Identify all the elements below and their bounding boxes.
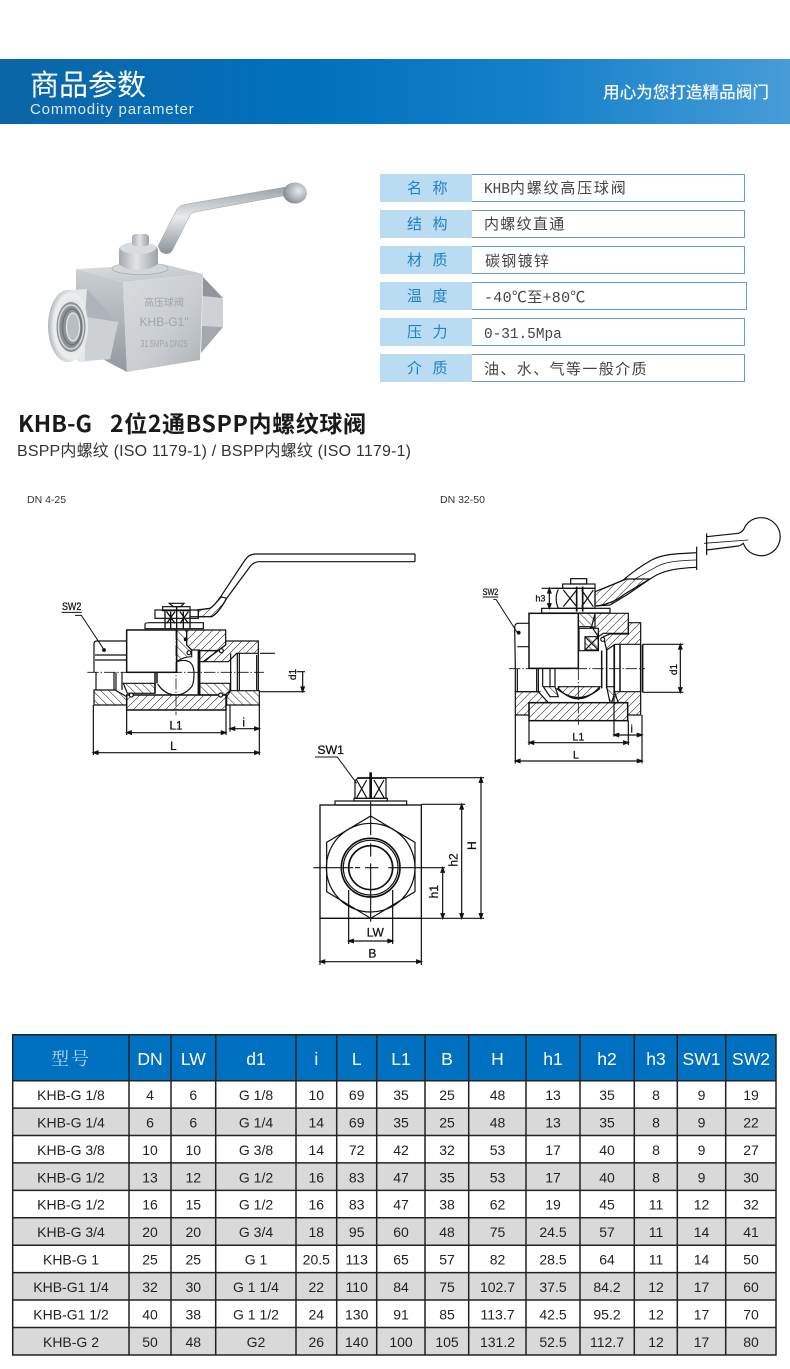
row 10: G2 xyxy=(247,1334,266,1350)
row 5 xyxy=(37,1197,759,1213)
table header: DN xyxy=(137,1049,163,1069)
engraved marks: 31.5MPa DN25 xyxy=(140,339,188,350)
technical drawing: DN 4-25 section view xyxy=(62,554,415,755)
parameter table xyxy=(13,1035,776,1355)
stem top xyxy=(355,778,386,798)
H dimension xyxy=(320,778,484,918)
row 9: 95.2 xyxy=(593,1306,621,1322)
row 8: 102.7 xyxy=(480,1279,515,1295)
row 8: G 1 1/4 xyxy=(233,1279,279,1295)
technical drawing: DN 32-50 section view xyxy=(483,518,780,763)
row 8: 75 xyxy=(439,1279,455,1295)
row 2: 6 xyxy=(189,1114,197,1130)
row 5: 16 xyxy=(309,1197,324,1213)
block top face xyxy=(76,264,203,282)
table header xyxy=(13,1035,776,1081)
row 2: 8 xyxy=(652,1114,660,1130)
row 8: 30 xyxy=(186,1279,201,1295)
left hex end xyxy=(60,289,118,362)
ball and bore xyxy=(158,660,194,695)
i dimension: i xyxy=(242,715,245,729)
row 1: 19 xyxy=(743,1087,759,1103)
row 1: 9 xyxy=(698,1087,706,1103)
spec row: name: 名称 xyxy=(407,177,458,198)
i dimension: i xyxy=(630,724,633,736)
row 10: 80 xyxy=(743,1334,759,1350)
h3 dimension xyxy=(535,588,563,608)
h2 dimension xyxy=(421,804,465,918)
handle xyxy=(158,187,288,254)
row 7: 64 xyxy=(599,1252,615,1268)
row 9: G 1 1/2 xyxy=(233,1306,279,1322)
row 9: 24 xyxy=(309,1306,324,1322)
table stripes xyxy=(13,1108,776,1355)
L1 dimension: L1 xyxy=(572,732,584,744)
LW dimension: LW xyxy=(367,926,385,940)
row 3: 32 xyxy=(439,1142,455,1158)
product photo: ball valve xyxy=(48,182,307,372)
row 5: 11 xyxy=(649,1197,663,1213)
table header: B xyxy=(441,1049,453,1069)
i dimension xyxy=(230,705,259,755)
row 7: 65 xyxy=(393,1252,409,1268)
spec row: medium: 介质 xyxy=(407,357,458,378)
table grid xyxy=(13,1035,776,1355)
d1 dimension: d1 xyxy=(669,663,680,675)
row 1: 13 xyxy=(545,1087,561,1103)
row 1: 10 xyxy=(309,1087,324,1103)
row 9: 40 xyxy=(142,1306,158,1322)
header banner xyxy=(0,59,790,124)
h2 dimension: h2 xyxy=(446,853,460,867)
white block xyxy=(529,613,578,668)
row 4: KHB-G 1/2 xyxy=(37,1169,105,1185)
hex nut xyxy=(327,816,415,918)
row 4: 12 xyxy=(186,1169,201,1185)
stem assembly xyxy=(571,579,587,584)
row 10: 48 xyxy=(186,1334,201,1350)
row 8: 84 xyxy=(393,1279,409,1295)
row 3: 14 xyxy=(309,1142,324,1158)
spec row: medium xyxy=(380,354,744,382)
row 5: 45 xyxy=(599,1197,615,1213)
row 9: 38 xyxy=(186,1306,201,1322)
H dimension: H xyxy=(465,841,479,850)
row 6: 20 xyxy=(142,1224,158,1240)
row 1: 35 xyxy=(599,1087,615,1103)
row 6: 20 xyxy=(186,1224,201,1240)
SW1 callout: SW1 xyxy=(317,743,344,757)
row 7: 25 xyxy=(186,1252,201,1268)
row 3: 8 xyxy=(652,1142,660,1158)
row 10: KHB-G 2 xyxy=(43,1334,99,1350)
washer and collar xyxy=(112,262,168,274)
row 5: G 1/2 xyxy=(239,1197,273,1213)
row 2: 25 xyxy=(439,1114,455,1130)
row 4: G 1/2 xyxy=(239,1169,273,1185)
row 2: 6 xyxy=(146,1114,154,1130)
row 3: 10 xyxy=(186,1142,201,1158)
row 5: 83 xyxy=(349,1197,365,1213)
row 5: 62 xyxy=(490,1197,505,1213)
spec row: structure: 内螺纹直通 xyxy=(484,213,566,234)
L dimension: L xyxy=(573,750,579,762)
engraved marks: KHB-G1" xyxy=(140,315,188,329)
row 2: 35 xyxy=(599,1114,615,1130)
row 5: 12 xyxy=(694,1197,709,1213)
row 6: G 3/4 xyxy=(239,1224,273,1240)
row 5: KHB-G 1/2 xyxy=(37,1197,105,1213)
row 9: 12 xyxy=(648,1306,664,1322)
spec row: pressure: 0-31.5Mpa xyxy=(484,327,562,343)
spec row: pressure xyxy=(380,318,744,346)
block front face xyxy=(123,274,203,372)
i dimension xyxy=(614,644,642,763)
spec row: structure: 结构 xyxy=(407,213,458,234)
row 3: G 3/8 xyxy=(239,1142,273,1158)
row 4: 13 xyxy=(142,1169,158,1185)
row 1: 8 xyxy=(652,1087,660,1103)
d1 dimension xyxy=(643,644,683,692)
spec row: temperature: -40℃至+80℃ xyxy=(484,290,586,307)
center lines xyxy=(313,866,445,869)
SW2 callout: SW2 xyxy=(62,601,81,613)
row 10: 26 xyxy=(309,1334,324,1350)
engraved marks: 高压球阀 xyxy=(144,294,184,309)
row 2 xyxy=(37,1114,759,1130)
row 5: 15 xyxy=(186,1197,201,1213)
table header: L xyxy=(352,1049,362,1069)
row 10: 105 xyxy=(435,1334,459,1350)
row 10: 100 xyxy=(389,1334,413,1350)
row 3: 40 xyxy=(599,1142,615,1158)
row 2: 48 xyxy=(490,1114,505,1130)
row 8: 17 xyxy=(694,1279,709,1295)
lower hatched parts xyxy=(123,683,155,693)
row 3: 10 xyxy=(142,1142,158,1158)
spec row: material xyxy=(380,246,744,274)
table header: L1 xyxy=(391,1049,411,1069)
h1 dimension xyxy=(427,868,444,918)
SW2 callout xyxy=(62,601,103,649)
d1 dimension xyxy=(260,653,305,692)
row 8: 37.5 xyxy=(539,1279,567,1295)
row 10: 17 xyxy=(694,1334,709,1350)
label: DN 4-25: DN 4-25 xyxy=(27,494,66,506)
row 8: 32 xyxy=(142,1279,158,1295)
table header: h2 xyxy=(597,1049,617,1069)
row 7: 14 xyxy=(694,1252,709,1268)
SW1 callout xyxy=(315,743,357,783)
row 4: 9 xyxy=(698,1169,706,1185)
row 3 xyxy=(37,1142,759,1158)
row 4: 16 xyxy=(309,1169,324,1185)
h1 dimension: h1 xyxy=(427,885,441,898)
table header: h3 xyxy=(646,1049,666,1069)
upper hatched body xyxy=(187,630,226,662)
row 6: KHB-G 3/4 xyxy=(37,1224,105,1240)
engraved marks xyxy=(140,294,188,350)
SW2 callout: SW2 xyxy=(483,587,498,597)
row 7 xyxy=(43,1252,759,1268)
row 1 xyxy=(37,1087,759,1103)
row 1: 69 xyxy=(349,1087,365,1103)
row 5: 47 xyxy=(393,1197,409,1213)
row 7: 82 xyxy=(490,1252,505,1268)
row 7: 50 xyxy=(743,1252,759,1268)
row 8: 22 xyxy=(309,1279,324,1295)
row 4: 35 xyxy=(439,1169,455,1185)
row 1: 6 xyxy=(189,1087,197,1103)
spec table xyxy=(380,174,746,382)
row 2: 13 xyxy=(545,1114,561,1130)
row 5: 38 xyxy=(439,1197,455,1213)
row 8: 12 xyxy=(648,1279,664,1295)
center lines xyxy=(509,667,645,670)
L dimension xyxy=(93,705,259,755)
spec row: medium: 油、水、气等一般介质 xyxy=(484,358,648,379)
table header: 型号 xyxy=(51,1045,91,1071)
row 6: 48 xyxy=(439,1224,455,1240)
row 7: 28.5 xyxy=(539,1252,567,1268)
right hex stub xyxy=(201,277,223,353)
row 9: 17 xyxy=(694,1306,709,1322)
row 1: G 1/8 xyxy=(239,1087,273,1103)
row 4: 17 xyxy=(545,1169,561,1185)
row 2: KHB-G 1/4 xyxy=(37,1114,105,1130)
row 7: 11 xyxy=(649,1252,663,1268)
row 6: 57 xyxy=(599,1224,615,1240)
row 9: 70 xyxy=(743,1306,759,1322)
table header: d1 xyxy=(246,1049,266,1069)
spec row: name: KHB内螺纹高压球阀 xyxy=(484,177,628,198)
row 2: 69 xyxy=(349,1114,365,1130)
row 6: 18 xyxy=(309,1224,324,1240)
row 6: 41 xyxy=(743,1224,759,1240)
left end xyxy=(94,641,127,672)
row 1: 48 xyxy=(490,1087,505,1103)
row 4 xyxy=(37,1169,759,1185)
label: DN 32-50: DN 32-50 xyxy=(440,494,485,506)
row 5: 19 xyxy=(545,1197,561,1213)
lower hatched parts xyxy=(543,687,558,697)
row 3: KHB-G 3/8 xyxy=(37,1142,105,1158)
spec row: material: 材质 xyxy=(407,249,458,270)
row 9: 85 xyxy=(439,1306,455,1322)
table header: H xyxy=(491,1049,504,1069)
stem assembly xyxy=(169,603,184,607)
row 4: 8 xyxy=(652,1169,660,1185)
row 3: 9 xyxy=(698,1142,706,1158)
row 3: 27 xyxy=(743,1142,759,1158)
row 7: KHB-G 1 xyxy=(43,1252,99,1268)
h3 dimension: h3 xyxy=(535,594,545,604)
L dimension: L xyxy=(170,740,177,753)
row 8: 84.2 xyxy=(593,1279,621,1295)
table header: h1 xyxy=(543,1049,563,1069)
L1 dimension xyxy=(529,721,628,745)
spec row: material: 碳钢镀锌 xyxy=(485,250,550,271)
table header: SW1 xyxy=(683,1049,720,1069)
row 6: 24.5 xyxy=(539,1224,567,1240)
row 7: 20.5 xyxy=(303,1252,330,1268)
row 5: 32 xyxy=(743,1197,759,1213)
left end xyxy=(515,623,529,669)
row 6: 95 xyxy=(349,1224,365,1240)
upper hatched body xyxy=(578,613,595,628)
row 9: 91 xyxy=(393,1306,409,1322)
table header: i xyxy=(314,1049,318,1069)
row 2: 22 xyxy=(743,1114,759,1130)
lever handle xyxy=(197,554,415,610)
banner slogan: 用心为您打造精品阀门 xyxy=(603,79,769,103)
table header: LW xyxy=(181,1049,206,1069)
row 7: G 1 xyxy=(245,1252,267,1268)
ball knob xyxy=(707,518,780,556)
L1 dimension xyxy=(127,710,226,735)
L1 dimension: L1 xyxy=(170,720,182,733)
table header: SW2 xyxy=(732,1049,770,1069)
row 10: 140 xyxy=(345,1334,369,1350)
table body xyxy=(33,1087,759,1350)
row 5: 16 xyxy=(142,1197,158,1213)
row 6: 75 xyxy=(490,1224,505,1240)
row 2: 9 xyxy=(698,1114,706,1130)
row 4: 53 xyxy=(490,1169,505,1185)
spec row: structure xyxy=(380,210,744,238)
row 4: 40 xyxy=(599,1169,615,1185)
row 10: 112.7 xyxy=(590,1334,624,1350)
block outline xyxy=(320,805,421,918)
row 9: 113.7 xyxy=(480,1306,515,1322)
row 3: 72 xyxy=(349,1142,365,1158)
SW2 callout xyxy=(483,587,517,633)
row 3: 17 xyxy=(545,1142,561,1158)
row 9: 130 xyxy=(345,1306,369,1322)
row 4: 47 xyxy=(393,1169,409,1185)
banner subtitle: Commodity parameter xyxy=(30,101,195,118)
spec row: pressure: 压力 xyxy=(407,321,458,342)
row 3: 53 xyxy=(490,1142,505,1158)
row 9 xyxy=(33,1306,759,1322)
row 2: 35 xyxy=(393,1114,409,1130)
d1 dimension: d1 xyxy=(288,668,299,680)
row 2: 14 xyxy=(309,1114,324,1130)
row 6 xyxy=(37,1224,759,1240)
spec row: name xyxy=(380,174,744,202)
row 7: 113 xyxy=(346,1252,368,1268)
section heading: KHB-G xyxy=(18,405,92,439)
row 3: 42 xyxy=(393,1142,409,1158)
row 9: 42.5 xyxy=(539,1306,567,1322)
row 4: 83 xyxy=(349,1169,365,1185)
row 10 xyxy=(43,1334,759,1350)
block left face xyxy=(76,269,127,372)
row 1: 4 xyxy=(146,1087,154,1103)
row 6: 11 xyxy=(649,1224,663,1240)
LW dimension xyxy=(349,890,393,944)
thread opening xyxy=(48,290,88,362)
row 10: 52.5 xyxy=(539,1334,567,1350)
row 8 xyxy=(33,1279,759,1295)
row 6: 14 xyxy=(694,1224,709,1240)
banner title: 商品参数 xyxy=(30,62,146,104)
curved handle xyxy=(600,553,697,590)
B dimension xyxy=(320,918,421,965)
row 4: 30 xyxy=(743,1169,759,1185)
row 8: KHB-G1 1/4 xyxy=(33,1279,109,1295)
center lines xyxy=(87,671,264,674)
spec row: temperature: 温度 xyxy=(407,285,458,306)
row 10: 50 xyxy=(142,1334,158,1350)
row 1: 35 xyxy=(393,1087,409,1103)
row 7: 25 xyxy=(142,1252,158,1268)
row 1: KHB-G 1/8 xyxy=(37,1087,105,1103)
row 10: 12 xyxy=(648,1334,664,1350)
white block xyxy=(127,630,177,672)
row 7: 57 xyxy=(439,1252,455,1268)
row 1: 25 xyxy=(439,1087,455,1103)
section subheading: BSPP内螺纹 (ISO 1179-1) / BSPP内螺纹 (ISO 1179-1) xyxy=(17,442,411,460)
row 9: KHB-G1 1/2 xyxy=(33,1306,109,1322)
row 10: 131.2 xyxy=(480,1334,515,1350)
B dimension: B xyxy=(368,947,376,961)
technical drawing: end view xyxy=(313,743,484,965)
row 8: 110 xyxy=(346,1279,368,1295)
L dimension xyxy=(515,715,642,763)
row 6: 60 xyxy=(393,1224,409,1240)
row 8: 60 xyxy=(743,1279,759,1295)
spec row: temperature xyxy=(380,282,746,310)
row 2: G 1/4 xyxy=(239,1114,273,1130)
section heading: 2位2通BSPP内螺纹球阀 xyxy=(110,405,366,439)
bore xyxy=(515,669,555,692)
